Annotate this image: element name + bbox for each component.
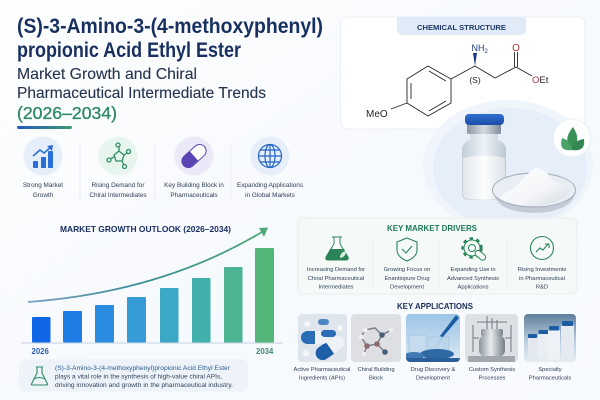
application: custom synthesis: Processes <box>479 376 506 382</box>
chemical structure tab: CHEMICAL STRUCTURE <box>417 23 506 32</box>
callout: summary <box>19 360 248 392</box>
application: APIs: Ingredients (APIs) <box>299 376 345 382</box>
application: custom synthesis: Custom Synthesis <box>469 367 515 373</box>
driver: investments: Rising Investments <box>518 267 566 273</box>
chart: market growth outlook: 2034 <box>256 347 274 356</box>
backdrop blob <box>423 100 593 232</box>
applications row <box>294 314 576 382</box>
chart title: MARKET GROWTH OUTLOOK (2026–2034) <box>60 224 231 234</box>
application: chiral building block: Block <box>369 376 383 382</box>
driver: chiral demand <box>307 237 365 290</box>
summary text <box>55 365 233 389</box>
molecule diagram: 2 <box>484 49 488 55</box>
highlight: global applications <box>237 136 303 199</box>
highlight: key building block <box>164 136 224 199</box>
highlight: strong market growth: Growth <box>33 192 54 199</box>
driver: enantiopure focus: Growing Focus on <box>384 267 430 273</box>
title: (S)-3-Amino-3-(4-methoxyphenyl) <box>17 13 323 38</box>
highlight: global applications: in Global Markets <box>245 192 295 199</box>
driver: chiral demand: Intermediates <box>319 284 354 290</box>
driver: chiral demand: Increasing Demand for <box>307 267 365 273</box>
highlight: strong market growth <box>23 136 63 199</box>
highlight: strong market growth: Strong Market <box>23 182 63 189</box>
molecule diagram: (S) <box>469 75 481 85</box>
chart: market growth outlook <box>21 224 283 356</box>
application: chiral building block <box>351 314 401 382</box>
summary text: plays a vital role in the synthesis of high-value chiral APIs, <box>55 374 222 380</box>
powder dish <box>492 168 576 213</box>
driver: advanced synthesis: Advanced Synthesis <box>447 276 499 282</box>
subtitle: Market Growth and Chiral <box>17 66 197 83</box>
highlight: chiral intermediates: Chiral Intermediates <box>89 192 147 199</box>
highlight: global applications: Expanding Applications <box>237 182 303 189</box>
application: chiral building block: Chiral Building <box>357 367 395 373</box>
driver: enantiopure focus <box>384 238 430 290</box>
application: drug discovery <box>404 314 460 382</box>
highlights row <box>23 136 303 200</box>
year range: (2026–2034) <box>17 103 117 123</box>
bars <box>32 248 274 342</box>
icon: leaf badge <box>553 119 591 157</box>
application: APIs <box>294 314 350 382</box>
application: drug discovery: Drug Discovery & <box>411 367 456 373</box>
summary text: driving innovation and growth in the pharmaceutical industry. <box>55 382 233 389</box>
subtitle <box>17 66 266 102</box>
application: specialty pharmaceuticals: Pharmaceuticals <box>529 376 571 382</box>
driver: investments: in Pharmaceutical <box>519 276 565 282</box>
title <box>17 13 323 62</box>
highlight: key building block: Pharmaceuticals <box>170 192 218 199</box>
driver: advanced synthesis: Applications <box>457 284 489 290</box>
drivers heading: KEY MARKET DRIVERS <box>387 223 477 233</box>
application: specialty pharmaceuticals <box>524 314 576 382</box>
axis labels: 2026 <box>32 347 50 356</box>
highlight: chiral intermediates: Rising Demand for <box>92 182 145 189</box>
highlight: key building block: Key Building Block in <box>164 182 224 189</box>
title underline <box>17 126 72 129</box>
application: APIs: Active Pharmaceutical <box>294 367 350 373</box>
molecule diagram: NH <box>472 43 484 53</box>
subtitle: Pharmaceutical Intermediate Trends <box>17 85 266 102</box>
driver: chiral demand: Chiral Pharmaceutical <box>308 276 364 282</box>
molecule diagram: O <box>512 43 520 54</box>
driver: enantiopure focus: Development <box>390 284 424 290</box>
application: specialty pharmaceuticals: Specialty <box>538 367 562 373</box>
molecule diagram: MeO <box>366 109 388 120</box>
driver: enantiopure focus: Enantiopure Drug <box>384 276 430 282</box>
driver: advanced synthesis: Expanding Use in <box>450 267 496 273</box>
molecule diagram <box>366 43 549 120</box>
product illustration <box>423 100 593 232</box>
panel: key market drivers <box>298 218 577 294</box>
application: drug discovery: Development <box>416 376 450 382</box>
summary text: (S)-3-Amino-3-(4-methoxyphenyl)propionic Acid Ethyl Ester <box>55 365 230 372</box>
application: custom synthesis <box>465 314 518 382</box>
highlight: chiral intermediates <box>89 136 147 199</box>
driver: investments: R&D <box>536 284 548 290</box>
icon: flask <box>31 367 48 385</box>
growth arrow <box>28 228 268 302</box>
title: propionic Acid Ethyl Ester <box>17 37 241 62</box>
heading: key applications: KEY APPLICATIONS <box>397 301 473 311</box>
chemical structure tab <box>397 17 526 35</box>
vial <box>462 114 506 200</box>
driver: advanced synthesis <box>447 238 499 290</box>
driver: investments <box>518 236 566 290</box>
molecule diagram: OEt <box>532 75 549 86</box>
panel: chemical structure <box>340 17 585 129</box>
